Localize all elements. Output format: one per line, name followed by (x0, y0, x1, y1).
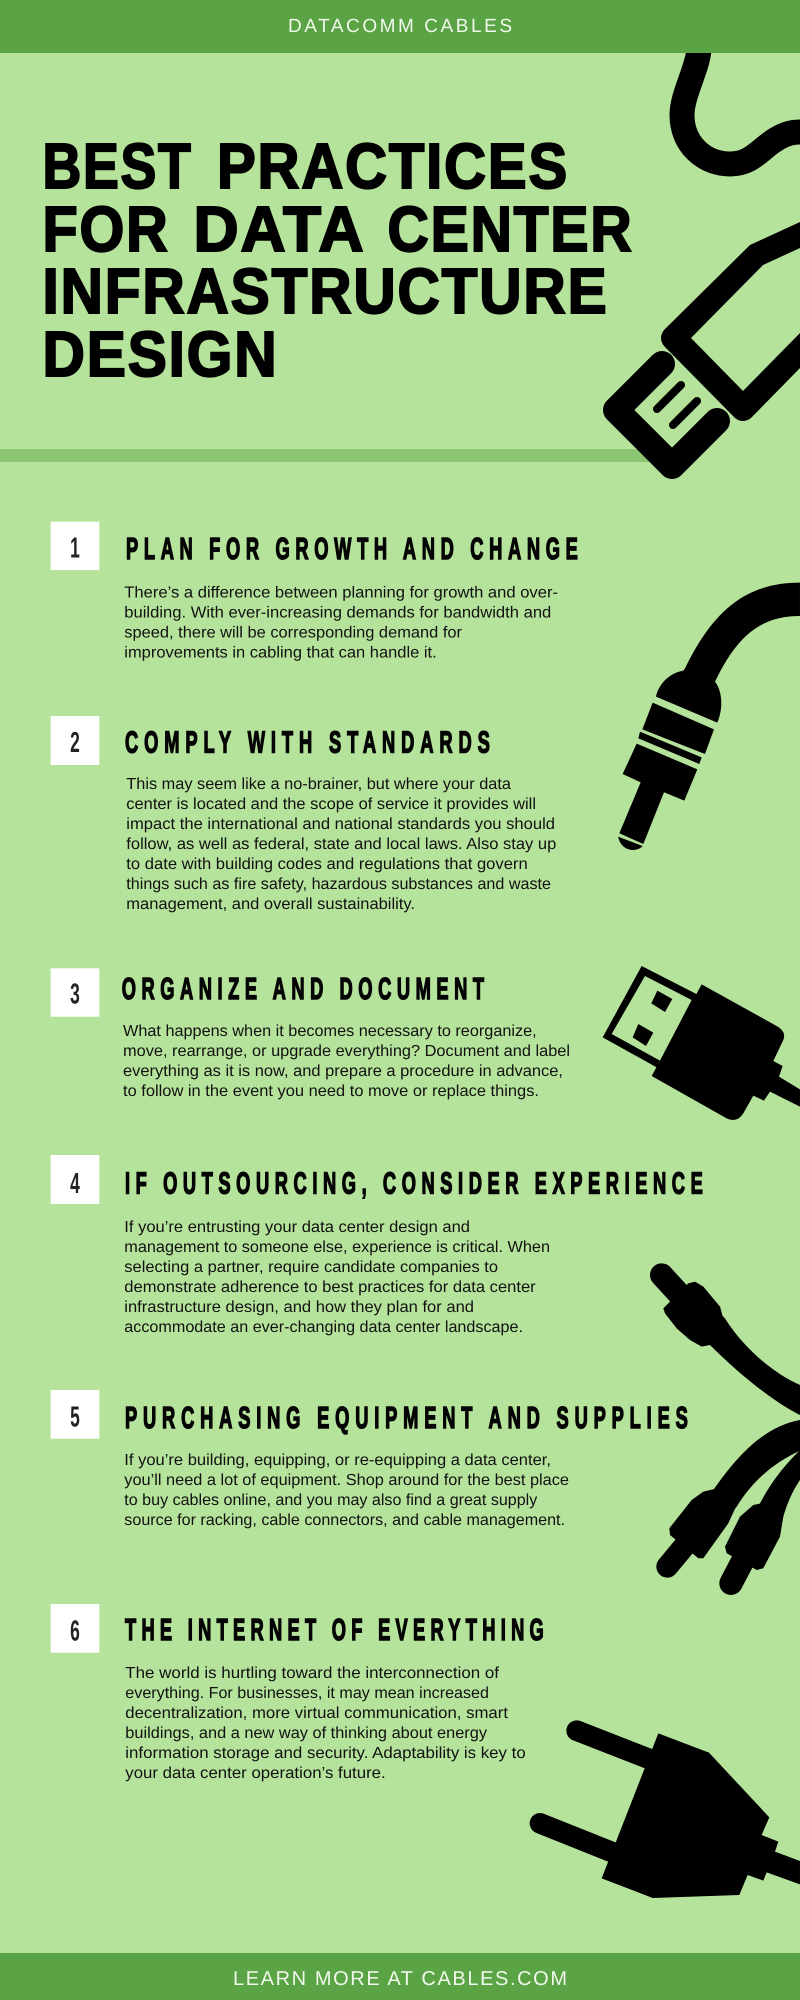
heading 6: THE INTERNET OF EVERYTHING (125, 1613, 544, 1647)
heading 2: COMPLY WITH STANDARDS (125, 726, 490, 760)
body 3 (123, 1023, 570, 1100)
title: CENTER (388, 193, 634, 265)
title divider (0, 449, 655, 462)
title: FOR (42, 193, 170, 265)
icon: audio jack (618, 583, 800, 850)
body 6: buildings, and a new way of thinking about energy (125, 1725, 487, 1742)
title: PRACTICES (217, 130, 569, 202)
number 4 (51, 1155, 99, 1204)
section 4 (51, 1155, 703, 1336)
icon: power plug (540, 1731, 800, 1898)
section 1 (51, 522, 578, 662)
icon: USB connector (603, 966, 800, 1120)
body 4: If you’re entrusting your data center design and (124, 1219, 470, 1236)
number 5: 5 (70, 1402, 80, 1434)
body 5: source for racking, cable connectors, and cable management. (124, 1512, 565, 1529)
body 2: center is located and the scope of service it provides will (126, 796, 536, 813)
number 3 (51, 968, 99, 1017)
body 2: to date with building codes and regulations that govern (126, 856, 528, 873)
body 4: infrastructure design, and how they plan for and (124, 1299, 474, 1316)
body 1: improvements in cabling that can handle it. (124, 645, 437, 662)
body 5: you’ll need a lot of equipment. Shop around for the best place (124, 1472, 569, 1489)
icon: wavy cable with plug (616, 50, 800, 466)
header bar: DATACOMM CABLES (288, 16, 512, 37)
body 6: everything. For businesses, it may mean increased (125, 1685, 489, 1702)
body 3: move, rearrange, or upgrade everything? Document and label (123, 1043, 570, 1060)
number 1: 1 (70, 532, 80, 564)
body 1: building. With ever-increasing demands for bandwidth and (124, 605, 551, 622)
body 6: The world is hurtling toward the interconnection of (125, 1665, 500, 1682)
number 1 (51, 522, 99, 570)
body 2: follow, as well as federal, state and local laws. Also stay up (126, 836, 556, 853)
body 5: If you’re building, equipping, or re-equipping a data center, (124, 1452, 551, 1469)
title: DESIGN (42, 318, 278, 390)
section 3 (51, 968, 570, 1100)
icon: RCA cables (662, 1275, 800, 1583)
body 6 (125, 1665, 526, 1782)
body 4: demonstrate adherence to best practices for data center (124, 1279, 536, 1296)
body 2: This may seem like a no-brainer, but where your data (126, 776, 511, 793)
body 2: management, and overall sustainability. (126, 896, 415, 913)
body 1: There’s a difference between planning for growth and over- (124, 585, 558, 602)
body 1 (124, 585, 558, 662)
body 5 (124, 1452, 569, 1529)
heading 1: PLAN FOR GROWTH AND CHANGE (126, 532, 578, 566)
body 4 (124, 1219, 550, 1336)
number 6 (51, 1604, 99, 1653)
body 4: selecting a partner, require candidate companies to (124, 1259, 498, 1276)
body 1: speed, there will be corresponding demand for (124, 625, 463, 642)
section 6 (51, 1604, 544, 1782)
section 2 (51, 716, 556, 913)
body 2: things such as fire safety, hazardous substances and waste (126, 876, 551, 893)
body 6: decentralization, more virtual communication, smart (125, 1705, 509, 1722)
number 2 (51, 716, 99, 765)
body 6: your data center operation’s future. (125, 1765, 386, 1782)
footer bar: LEARN MORE AT CABLES.COM (233, 1968, 567, 1990)
number 4: 4 (70, 1168, 80, 1200)
title: INFRASTRUCTURE (42, 255, 608, 327)
body 3: What happens when it becomes necessary to reorganize, (123, 1023, 537, 1040)
body 3: to follow in the event you need to move or replace things. (123, 1083, 539, 1100)
number 5 (51, 1390, 99, 1439)
heading 5: PURCHASING EQUIPMENT AND SUPPLIES (125, 1401, 688, 1435)
number 2: 2 (70, 727, 80, 759)
number 3: 3 (70, 979, 80, 1011)
number 6: 6 (70, 1615, 80, 1647)
title: BEST (42, 130, 192, 202)
section 5 (51, 1390, 688, 1529)
footer bar (0, 1953, 800, 2000)
body 5: to buy cables online, and you may also find a great supply (124, 1492, 537, 1509)
body 4: accommodate an ever-changing data center landscape. (124, 1319, 523, 1336)
body 3: everything as it is now, and prepare a procedure in advance, (123, 1063, 563, 1080)
heading 3: ORGANIZE AND DOCUMENT (122, 972, 484, 1006)
title: DATA (194, 193, 366, 265)
title (42, 130, 634, 390)
body 6: information storage and security. Adaptability is key to (125, 1745, 526, 1762)
body 2 (126, 776, 556, 913)
heading 4: IF OUTSOURCING, CONSIDER EXPERIENCE (125, 1167, 703, 1201)
header bar (0, 0, 800, 53)
body 4: management to someone else, experience is critical. When (124, 1239, 550, 1256)
body 2: impact the international and national standards you should (126, 816, 555, 833)
